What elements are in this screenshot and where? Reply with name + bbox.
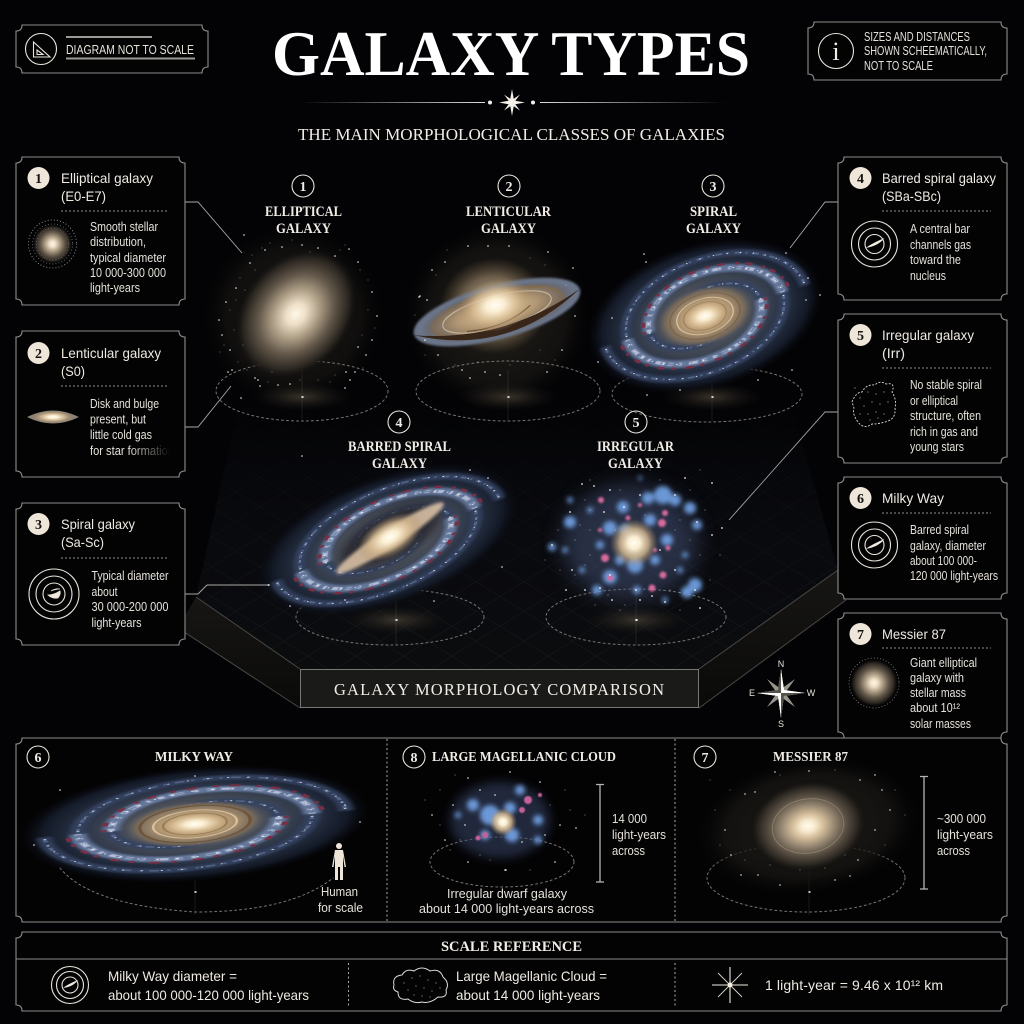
- milky way cell: for scale: [318, 901, 363, 915]
- panel 7: messier 87: Messier 87: [882, 626, 946, 642]
- compass rose: S: [778, 719, 784, 729]
- messier 87 cell: across: [937, 844, 970, 858]
- panel 5: irregular galaxy: structure, often: [910, 409, 981, 423]
- galaxy 2: lenticular: [405, 224, 600, 421]
- number and label: barred spiral: GALAXY: [372, 456, 427, 472]
- panel 6: milky way: 6: [857, 492, 864, 507]
- panel 5: irregular galaxy: [838, 314, 1007, 463]
- panel 1: elliptical galaxy: [16, 157, 185, 305]
- galaxy 4: barred spiral: [237, 432, 539, 648]
- galaxy 5: irregular: [545, 470, 726, 645]
- note: sizes and distances: NOT TO SCALE: [864, 59, 933, 73]
- panel 1: elliptical galaxy: distribution,: [90, 235, 146, 249]
- panel 4: barred spiral galaxy: nucleus: [910, 269, 946, 283]
- panel 6: milky way: [838, 477, 1007, 599]
- panel 5: irregular galaxy: Irregular galaxy: [882, 327, 974, 343]
- panel 7: messier 87: galaxy with: [910, 671, 964, 685]
- panel 4: barred spiral galaxy: 4: [857, 172, 864, 187]
- note: diagram not to scale: [16, 25, 208, 73]
- panel 2: lenticular galaxy: (S0): [61, 363, 85, 379]
- note: sizes and distances: i: [832, 37, 840, 66]
- panel 5: irregular galaxy: young stars: [910, 440, 964, 454]
- panel 4: barred spiral galaxy: (SBa-SBc): [882, 188, 941, 204]
- panel 3: spiral galaxy: [16, 503, 185, 645]
- number and label: spiral: SPIRAL: [690, 204, 737, 220]
- panel 2: lenticular galaxy: Disk and bulge: [90, 397, 159, 411]
- panel 3: spiral galaxy: Typical diameter: [92, 569, 168, 583]
- number and label: irregular: 5: [632, 416, 640, 431]
- large magellanic cloud cell: 14 000: [612, 812, 647, 826]
- large magellanic cloud cell: across: [612, 844, 645, 858]
- panel 7: messier 87: Giant elliptical: [910, 656, 977, 670]
- panel 1: elliptical galaxy: (E0-E7): [61, 188, 106, 204]
- milky way cell: [16, 746, 374, 915]
- number and label: spiral: 3: [710, 180, 716, 195]
- panel 4: barred spiral galaxy: [838, 157, 1007, 300]
- panel 4: barred spiral galaxy: Barred spiral galaxy: [882, 170, 996, 186]
- number and label: elliptical: ELLIPTICAL: [265, 204, 342, 220]
- scale reference panel: about 14 000 light-years: [456, 987, 600, 1003]
- galaxy 1: elliptical: [203, 223, 388, 421]
- galaxy 3: spiral: [568, 211, 842, 422]
- number and label: spiral: [686, 175, 741, 237]
- title: GALAXY TYPES: [272, 18, 750, 89]
- panel 6: milky way: Barred spiral: [910, 523, 969, 537]
- number and label: lenticular: GALAXY: [481, 221, 536, 237]
- subtitle: THE MAIN MORPHOLOGICAL CLASSES OF GALAXIES: [298, 125, 725, 144]
- panel 6: milky way: 120 000 light-years: [910, 569, 998, 583]
- large magellanic cloud cell: [403, 746, 666, 916]
- panel 7: messier 87: 7: [857, 628, 864, 643]
- panel 3: spiral galaxy: light-years: [92, 616, 142, 630]
- panel 3: spiral galaxy: about: [92, 585, 118, 599]
- floor platform: [186, 441, 846, 708]
- panel 1: elliptical galaxy: 1: [35, 172, 42, 187]
- compass rose: [749, 659, 816, 729]
- note: sizes and distances: SHOWN SCHEEMATICALLY,: [864, 44, 987, 58]
- scale reference panel: 1 light-year = 9.46 x 10¹² km: [765, 977, 943, 993]
- panel 5: irregular galaxy: or elliptical: [910, 394, 958, 408]
- scale reference panel: [16, 932, 1007, 1011]
- panel 2: lenticular galaxy: 2: [35, 347, 42, 362]
- panel 6: milky way: Milky Way: [882, 490, 944, 506]
- panel 6: milky way: about 100 000-: [910, 554, 977, 568]
- panel 5: irregular galaxy: (Irr): [882, 345, 905, 361]
- scale icon: star: [712, 967, 748, 1003]
- large magellanic cloud cell: light-years: [612, 828, 666, 842]
- number and label: irregular: GALAXY: [608, 456, 663, 472]
- large magellanic cloud cell: 8: [410, 751, 418, 766]
- large magellanic cloud cell: about 14 000 light-years across: [419, 902, 594, 916]
- panel 3: spiral galaxy: 3: [35, 518, 42, 533]
- milky way cell: 6: [34, 751, 42, 766]
- scale reference panel: Large Magellanic Cloud =: [456, 968, 607, 984]
- panel 4: barred spiral galaxy: channels gas: [910, 238, 971, 252]
- connector lines: [185, 202, 838, 594]
- note: sizes and distances: SIZES AND DISTANCES: [864, 30, 970, 44]
- number and label: barred spiral: [348, 411, 451, 472]
- number and label: barred spiral: 4: [396, 416, 402, 431]
- panel 5: irregular galaxy: No stable spiral: [910, 378, 982, 392]
- messier 87 cell: MESSIER 87: [773, 749, 848, 764]
- panel 3: spiral galaxy: 30 000-200 000: [92, 600, 169, 614]
- number and label: lenticular: [466, 175, 551, 237]
- bottom comparison panel: [16, 738, 1007, 922]
- number and label: irregular: IRREGULAR: [597, 439, 674, 455]
- panel 1: elliptical galaxy: Smooth stellar: [90, 220, 158, 234]
- milky way cell: Human: [321, 885, 358, 899]
- comparison banner: [300, 670, 698, 708]
- panel 4: barred spiral galaxy: A central bar: [910, 222, 970, 236]
- panel 5: irregular galaxy: rich in gas and: [910, 425, 978, 439]
- scale reference panel: Milky Way diameter =: [108, 968, 237, 984]
- panel 6: milky way: galaxy, diameter: [910, 539, 986, 553]
- panel 7: messier 87: [838, 613, 1007, 738]
- number and label: lenticular: LENTICULAR: [466, 204, 551, 220]
- number and label: elliptical: GALAXY: [276, 221, 331, 237]
- scale reference panel: SCALE REFERENCE: [441, 939, 582, 955]
- note: diagram not to scale: DIAGRAM NOT TO SCALE: [66, 43, 194, 57]
- panel 3: spiral galaxy: Spiral galaxy: [61, 516, 135, 532]
- panel 3: spiral galaxy: (Sa-Sc): [61, 534, 104, 550]
- messier 87 cell: [688, 743, 993, 915]
- panel 7: messier 87: solar masses: [910, 717, 971, 731]
- milky way cell: MILKY WAY: [155, 749, 233, 764]
- panel 2: lenticular galaxy: Lenticular galaxy: [61, 345, 161, 361]
- panel 2: lenticular galaxy: for star formation: [90, 444, 174, 458]
- panel 7: messier 87: stellar mass: [910, 686, 966, 700]
- number and label: lenticular: 2: [506, 180, 512, 195]
- comparison banner: GALAXY MORPHOLOGY COMPARISON: [334, 680, 664, 699]
- panel 5: irregular galaxy: 5: [857, 329, 864, 344]
- large magellanic cloud cell: Irregular dwarf galaxy: [447, 887, 568, 901]
- number and label: irregular: [597, 411, 674, 472]
- messier 87 cell: light-years: [937, 828, 993, 842]
- panel 1: elliptical galaxy: typical diameter: [90, 251, 166, 265]
- number and label: barred spiral: BARRED SPIRAL: [348, 439, 451, 455]
- compass rose: E: [749, 688, 755, 698]
- panel 4: barred spiral galaxy: toward the: [910, 253, 961, 267]
- compass rose: W: [807, 688, 816, 698]
- number and label: elliptical: [265, 175, 342, 237]
- panel 2: lenticular galaxy: little cold gas: [90, 428, 152, 442]
- messier 87 cell: 7: [702, 751, 708, 766]
- number and label: elliptical: 1: [300, 180, 306, 195]
- large magellanic cloud cell: LARGE MAGELLANIC CLOUD: [432, 749, 616, 764]
- messier 87 cell: ~300 000: [937, 812, 986, 826]
- panel 7: messier 87: about 10¹²: [910, 701, 960, 715]
- note: sizes and distances: [808, 22, 1007, 80]
- panel 2: lenticular galaxy: [16, 331, 185, 477]
- scale icon: cloud outline: [394, 968, 447, 1003]
- panel 2: lenticular galaxy: present, but: [90, 412, 146, 426]
- title divider with star: [300, 89, 726, 116]
- compass rose: N: [778, 659, 784, 669]
- scale reference panel: about 100 000-120 000 light-years: [108, 987, 309, 1003]
- panel 1: elliptical galaxy: 10 000-300 000: [90, 266, 166, 280]
- panel 1: elliptical galaxy: light-years: [90, 281, 140, 295]
- number and label: spiral: GALAXY: [686, 221, 741, 237]
- panel 1: elliptical galaxy: Elliptical galaxy: [61, 170, 153, 186]
- scale icon: milky way rings: [52, 966, 88, 1004]
